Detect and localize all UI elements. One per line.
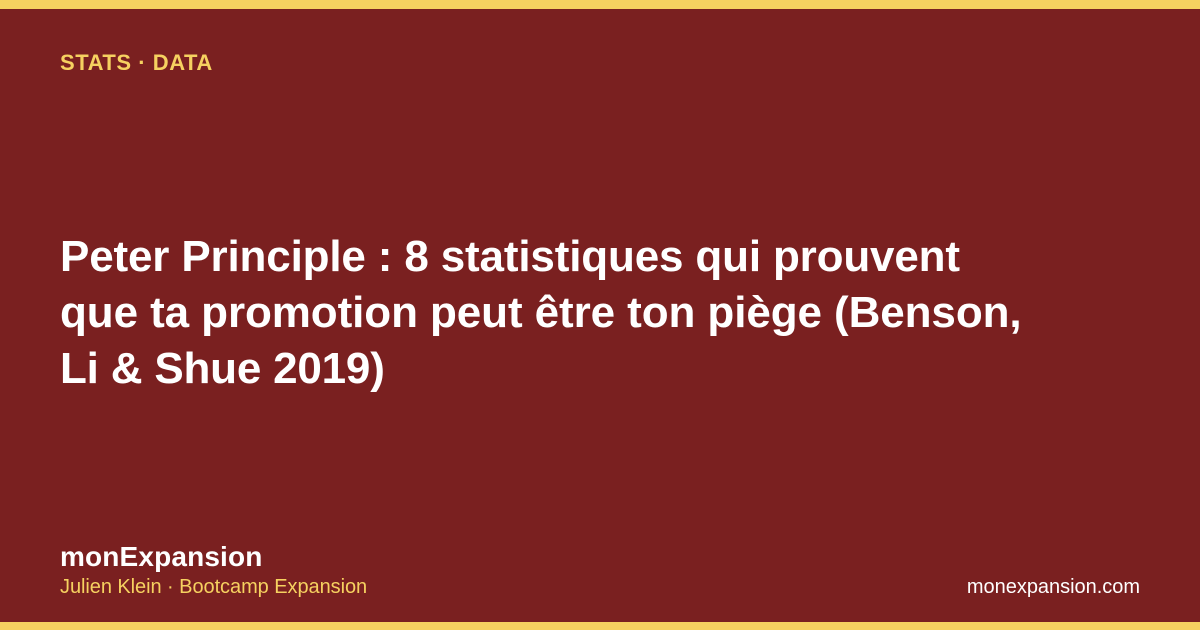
title: Li & Shue 2019) xyxy=(60,344,385,393)
author line: Julien Klein · Bootcamp Expansion xyxy=(60,576,367,598)
title: que ta promotion peut être ton piège (Benson, xyxy=(60,288,1022,337)
top accent bar xyxy=(0,0,1200,9)
bottom accent bar xyxy=(0,622,1200,630)
title: Peter Principle : 8 statistiques qui prouvent xyxy=(60,232,960,281)
website url: monexpansion.com xyxy=(967,576,1140,598)
brand name: monExpansion xyxy=(60,541,262,572)
category label: STATS · DATA xyxy=(60,50,213,75)
title xyxy=(60,232,1022,393)
